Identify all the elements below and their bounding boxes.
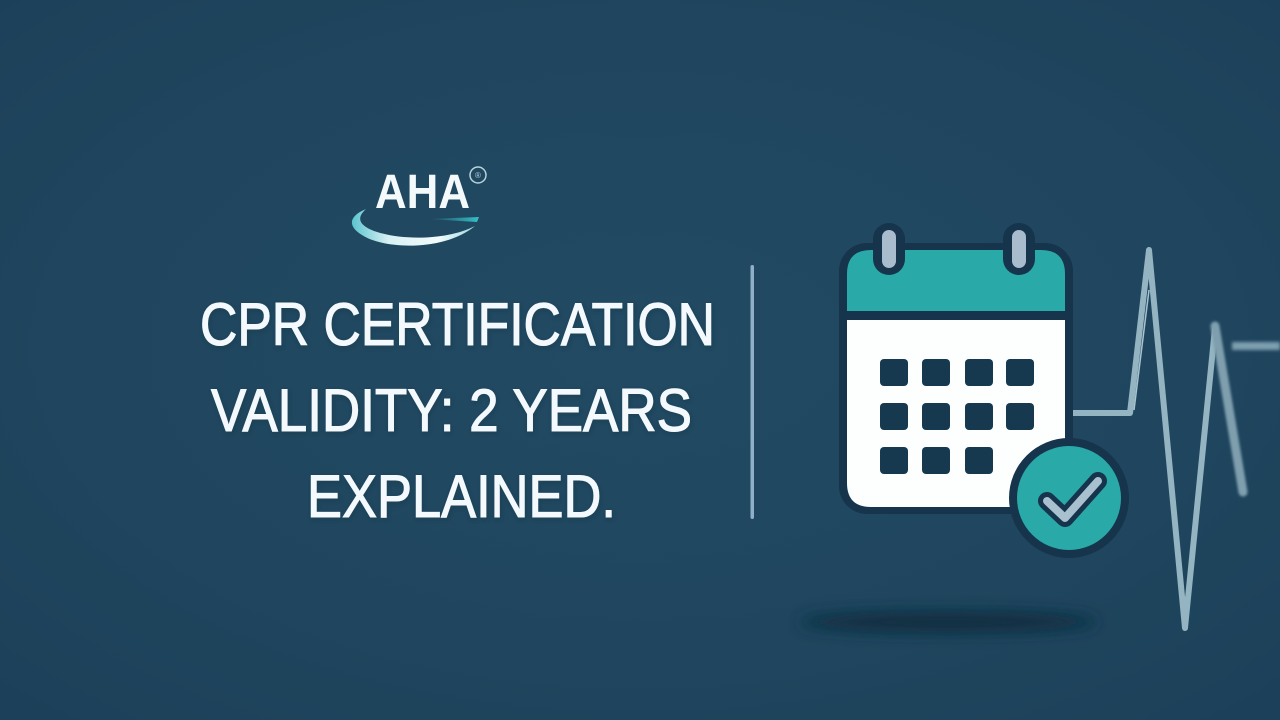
logo swoosh	[352, 209, 475, 246]
check badge	[1009, 438, 1129, 558]
logo wordmark: AHA	[375, 166, 470, 219]
heartbeat line	[1072, 250, 1280, 628]
vertical divider	[750, 265, 754, 519]
title line 3: EXPLAINED.	[307, 463, 616, 530]
title	[200, 291, 715, 530]
heartbeat main trace	[1072, 250, 1215, 628]
calendar frame	[839, 243, 1073, 514]
calendar binding rings	[873, 223, 1035, 275]
calendar date grid	[880, 359, 1034, 474]
logo teal accent line	[428, 217, 479, 222]
calendar page	[847, 320, 1065, 507]
calendar icon	[839, 223, 1073, 514]
logo registered mark: ®	[475, 171, 481, 180]
heartbeat thin echo	[1134, 290, 1149, 410]
shadow under calendar	[798, 612, 1098, 632]
logo: AHA	[352, 166, 486, 246]
heartbeat fading segment	[1215, 326, 1243, 492]
title line 2: VALIDITY: 2 YEARS	[211, 377, 692, 444]
title line 1: CPR CERTIFICATION	[200, 291, 715, 358]
check mark	[1047, 481, 1098, 518]
heartbeat faded tail	[1232, 342, 1280, 350]
calendar header	[847, 250, 1065, 311]
